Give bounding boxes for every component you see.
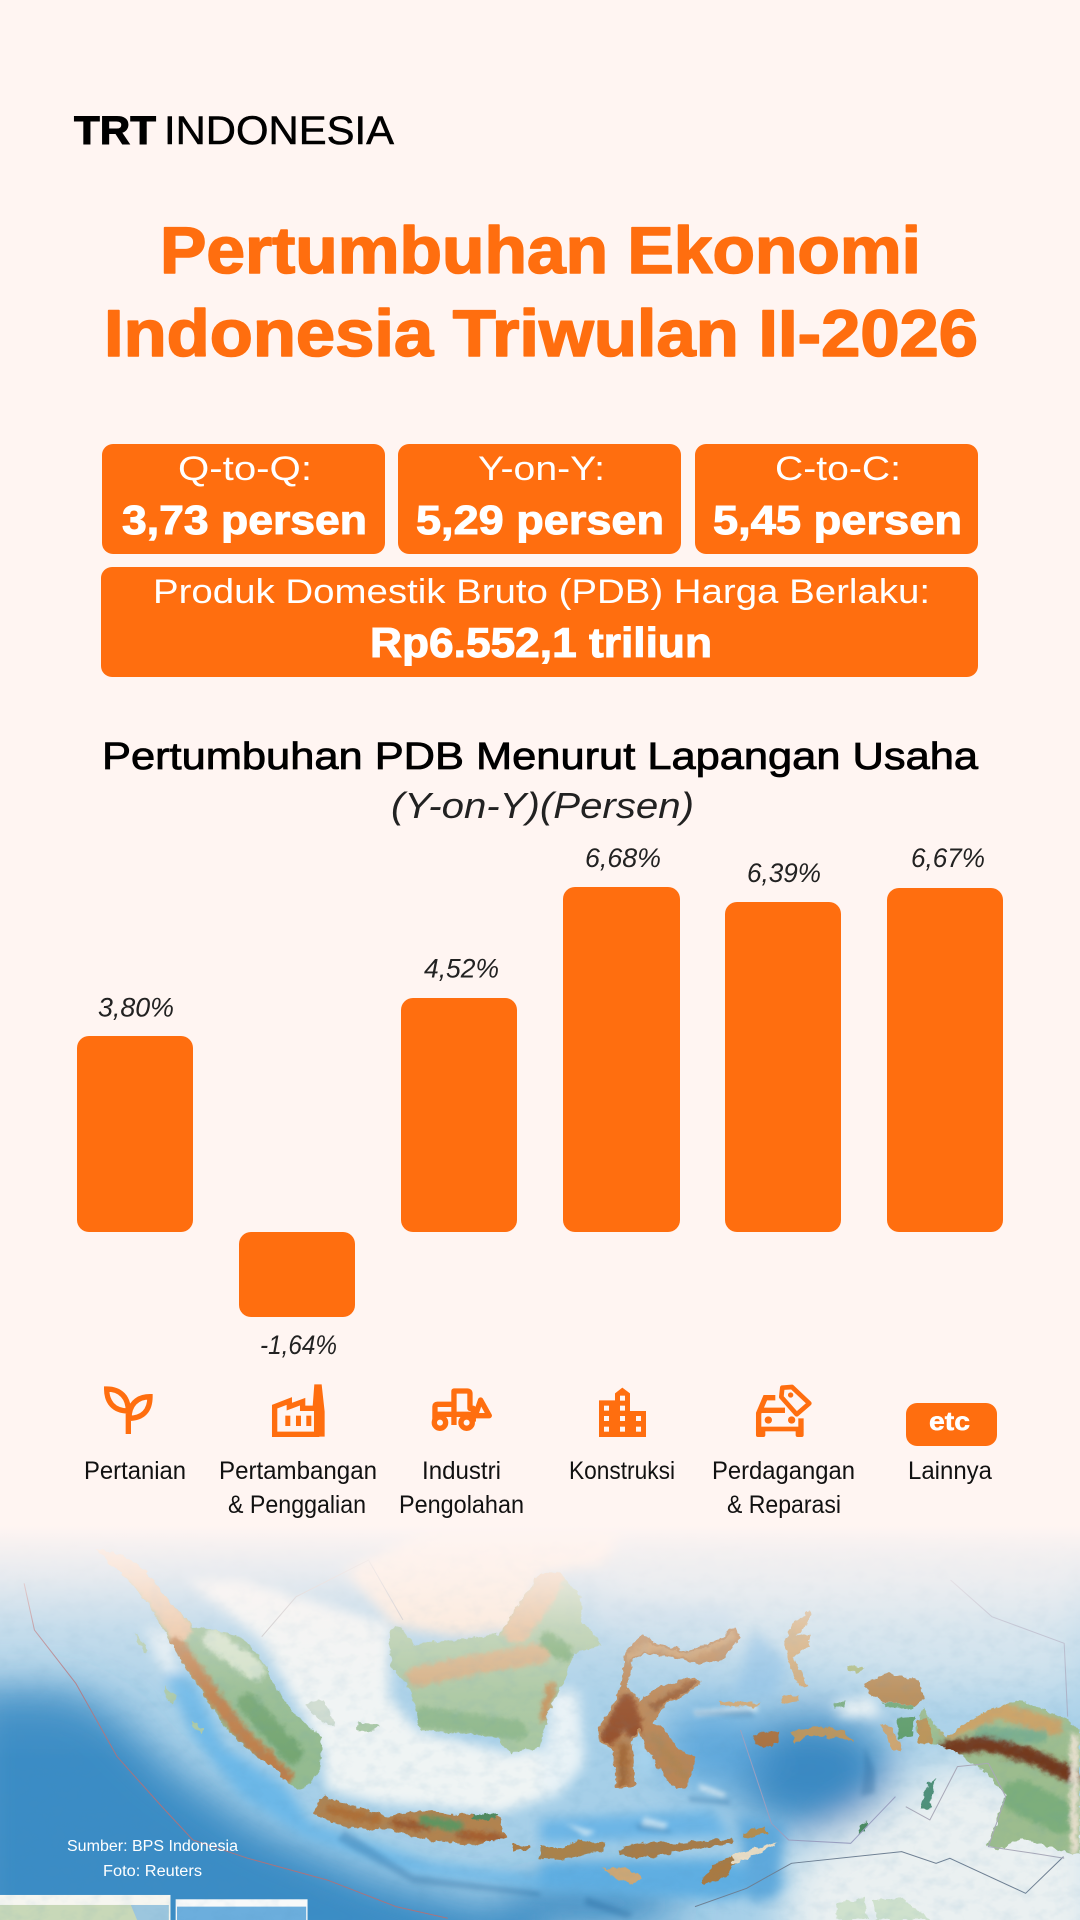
bar: Perdagangan [725, 858, 841, 1232]
icon: car with price tag [756, 1387, 809, 1437]
title: Indonesia Triwulan II-2026 [104, 296, 978, 370]
bar: Konstruksi [563, 843, 680, 1232]
bar: Industri [401, 954, 517, 1232]
chart heading: Pertumbuhan PDB Menurut Lapangan Usaha [102, 736, 979, 778]
category labels [84, 1457, 992, 1519]
category labels: & Reparasi [727, 1491, 841, 1519]
panel: Y-on-Y [398, 444, 681, 554]
panel: C-to-C: 5,45 persen [713, 497, 962, 543]
icon: etc badge [906, 1403, 997, 1446]
panel: Q-to-Q: Q-to-Q: [178, 450, 312, 488]
title [104, 213, 978, 370]
coastal shoal highlights [565, 1705, 758, 1837]
islands [96, 1550, 1080, 1920]
bar: Industri: 4,52% [424, 954, 499, 984]
category labels: Pengolahan [399, 1491, 524, 1519]
category labels: Perdagangan [712, 1457, 855, 1485]
logo: TRT Indonesia: TRT [74, 109, 156, 153]
panel: Q-to-Q [102, 444, 385, 554]
source credits: Foto: Reuters [103, 1863, 202, 1880]
bar: Pertambangan: -1,64% [260, 1330, 337, 1360]
category labels: Pertanian [84, 1457, 186, 1485]
category labels: Lainnya [908, 1457, 992, 1485]
panel: Y-on-Y: 5,29 persen [416, 497, 664, 543]
bar: Konstruksi: 6,68% [585, 843, 661, 873]
panel: PDB harga berlaku: Produk Domestik Bruto (PDB) Harga Berlaku: [153, 573, 930, 611]
icon: factory [275, 1384, 325, 1437]
bar: Pertanian: 3,80% [98, 992, 174, 1022]
chart heading [102, 736, 979, 826]
panel: C-to-C: C-to-C: [775, 450, 901, 488]
maritime boundary lines [24, 1560, 1068, 1918]
icon: plant [107, 1389, 150, 1434]
bar chart [77, 843, 1003, 1360]
panel: PDB harga berlaku [101, 567, 978, 677]
relief colouring [103, 1553, 1075, 1850]
category labels: Konstruksi [569, 1457, 675, 1485]
background map of Indonesia [0, 1542, 1080, 1920]
bar: Pertanian [77, 992, 193, 1232]
title: Pertumbuhan Ekonomi [160, 213, 921, 287]
category labels: Industri [422, 1457, 501, 1485]
logo: TRT Indonesia [74, 109, 394, 153]
minor islands [135, 1633, 498, 1819]
inset maps [0, 1895, 308, 1920]
bar: Lainnya: 6,67% [911, 843, 985, 873]
icon: buildings [599, 1388, 646, 1437]
panel: C-to-C [695, 444, 978, 554]
relief shadows [338, 1710, 875, 1918]
icon: etc badge: etc [929, 1406, 970, 1436]
chart heading: (Y-on-Y)(Persen) [391, 785, 694, 826]
source credits: Sumber: BPS Indonesia [67, 1838, 238, 1855]
icon: loader truck [434, 1391, 489, 1428]
panel: Q-to-Q: 3,73 persen [122, 497, 367, 543]
source credits [67, 1838, 238, 1880]
panel: Y-on-Y: Y-on-Y: [478, 450, 605, 488]
bar: Perdagangan: 6,39% [747, 858, 821, 888]
category labels: & Penggalian [228, 1491, 366, 1519]
logo: TRT Indonesia: INDONESIA [164, 109, 394, 153]
bar: Lainnya [887, 843, 1003, 1232]
category labels: Pertambangan [219, 1457, 377, 1485]
bar: Pertambangan [239, 1232, 355, 1360]
panel: PDB harga berlaku: Rp6.552,1 triliun [370, 619, 712, 666]
